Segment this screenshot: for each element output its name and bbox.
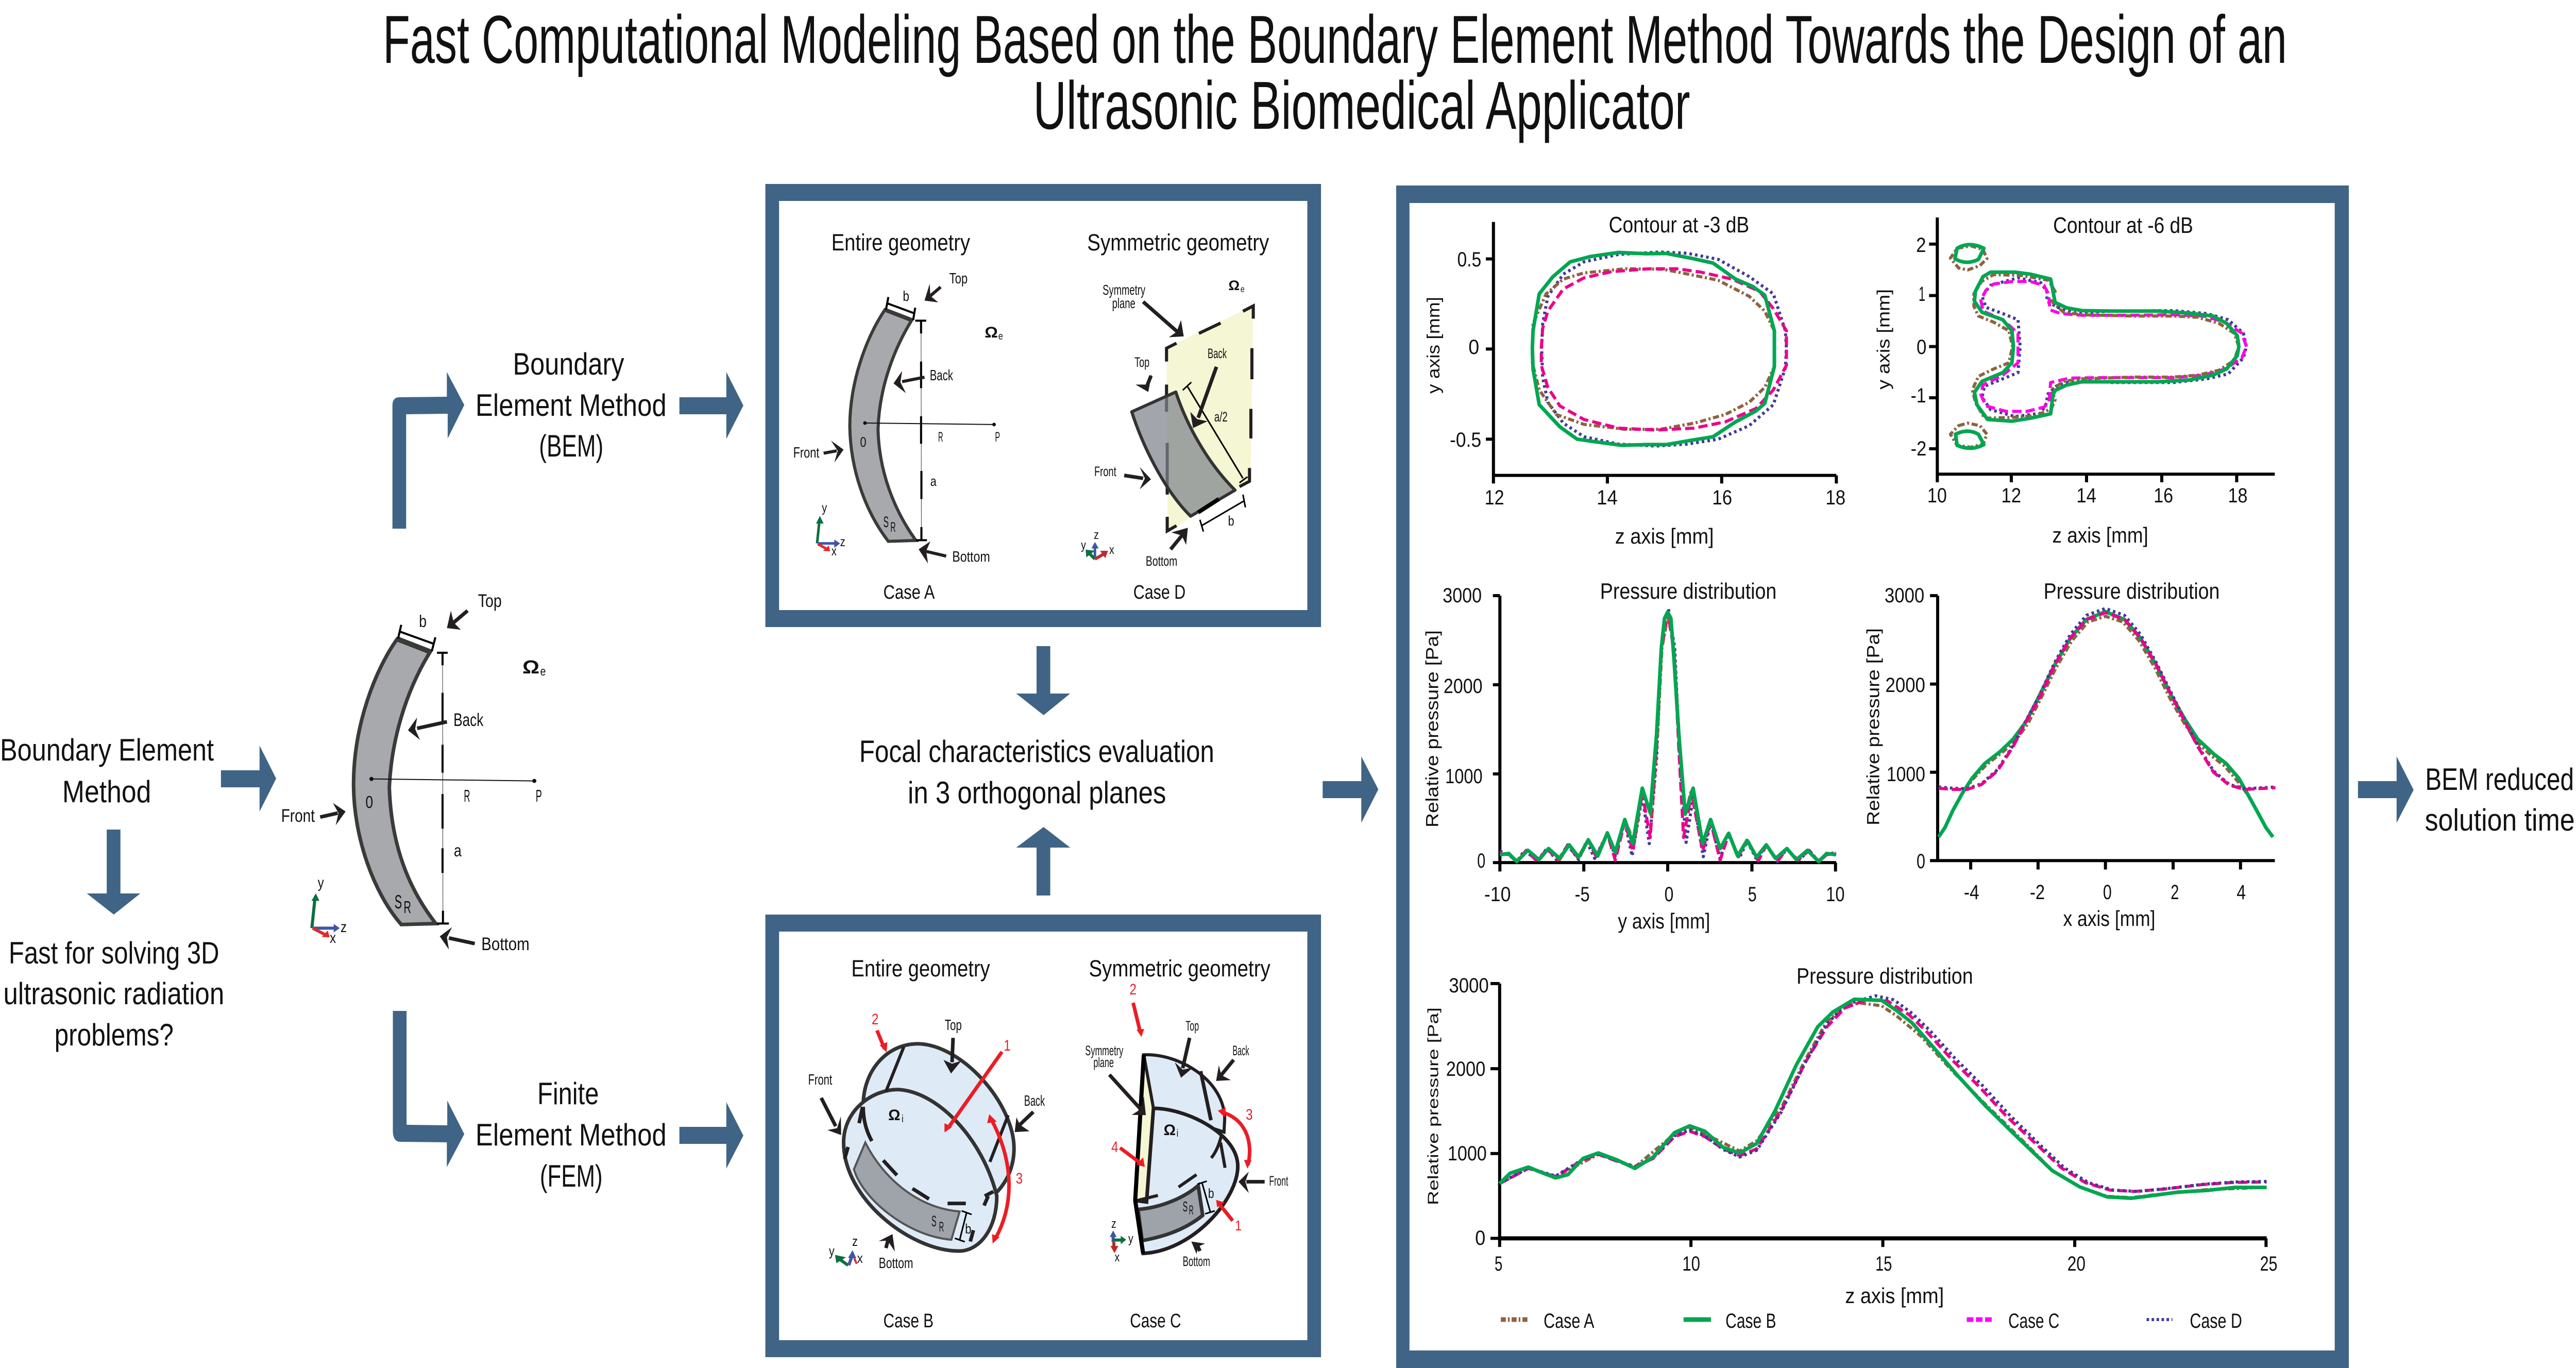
panel: case A geometry: R — [890, 520, 896, 535]
panel: case B geometry: Front — [808, 1071, 833, 1088]
chart: pressure along z axis — [1425, 964, 2277, 1308]
chart: pressure along x axis: Relative pressure [Pa] — [1863, 628, 1883, 825]
panel: case B geometry: R — [939, 1220, 944, 1235]
chart: pressure along y axis: Pressure distribution — [1600, 579, 1776, 604]
text: boundary element method — [0, 733, 214, 809]
chart: contour at -3 dB: -0.5 — [1450, 428, 1481, 451]
panel: case A geometry: z — [840, 534, 845, 549]
panel: case C geometry — [1085, 955, 1289, 1332]
chart: contour at -6 dB: 14 — [2076, 484, 2096, 507]
chart: pressure along y axis: 2000 — [1444, 674, 1483, 698]
panel: case C geometry: 4 — [1111, 1138, 1118, 1156]
panel: FEM cases frame — [766, 915, 1321, 1357]
panel: case A geometry: x — [832, 544, 837, 559]
chart: pressure along x axis: 1000 — [1887, 763, 1925, 786]
diagram: base geometry: Bottom — [481, 934, 530, 954]
chart: contour at -3 dB: z axis [mm] — [1615, 525, 1714, 549]
panel: case A geometry: P — [995, 430, 1000, 445]
arrow: FEM panel up to evaluation — [1016, 827, 1070, 896]
panel: case A geometry: Ω — [985, 323, 998, 341]
chart: pressure along x axis: 0 — [1917, 850, 1925, 873]
panel: case A geometry: Front — [793, 444, 820, 461]
diagram: base geometry: Ω — [522, 656, 539, 678]
chart: pressure along y axis: 3000 — [1443, 584, 1482, 607]
panel: case D geometry: Ω — [1228, 278, 1240, 294]
arrow: evaluation to charts — [1323, 756, 1378, 823]
panel: case A geometry: R — [938, 430, 943, 445]
panel: case C geometry: plane — [1093, 1055, 1114, 1071]
text: focal characteristics evaluation: Focal characteristics evaluation — [859, 734, 1214, 769]
arrow: up to BEM — [393, 372, 464, 529]
chart: contour at -6 dB: 0 — [1917, 335, 1926, 359]
chart: contour at -3 dB — [1424, 212, 1845, 549]
diagram: base geometry: P — [536, 787, 542, 806]
text: FEM: Finite — [537, 1076, 599, 1111]
panel: case D geometry: x — [1109, 543, 1114, 557]
chart: contour at -6 dB: 18 — [2228, 484, 2247, 507]
chart: pressure along x axis: 2000 — [1886, 673, 1925, 697]
arrow: FEM to panel — [680, 1102, 743, 1169]
title — [383, 2, 2287, 144]
chart: contour at -3 dB: 18 — [1825, 486, 1845, 509]
text: boundary element method: Method — [62, 774, 151, 809]
panel: case A geometry: 0 — [860, 435, 866, 450]
diagram: base geometry: R — [403, 898, 411, 917]
chart: pressure along z axis: z axis [mm] — [1845, 1284, 1944, 1308]
text: boundary element method: Boundary Element — [0, 733, 214, 767]
arrow: charts to conclusion — [2358, 756, 2414, 823]
chart: pressure along z axis: 20 — [2067, 1252, 2086, 1275]
chart: pressure along z axis: 1000 — [1448, 1142, 1487, 1165]
legend: Case C — [2008, 1309, 2059, 1332]
panel: case D geometry: Case D — [1133, 582, 1185, 603]
chart: pressure along z axis: Relative pressure [Pa] — [1425, 1007, 1442, 1205]
arrow: to geometry — [221, 746, 276, 812]
panel: case B geometry: S — [931, 1212, 937, 1230]
legend: Case D — [2190, 1309, 2242, 1332]
panel: case B geometry: Back — [1024, 1092, 1045, 1109]
chart: pressure along y axis: 5 — [1748, 883, 1757, 906]
panel: case B geometry: y — [829, 1244, 835, 1259]
chart: pressure along x axis: -2 — [2030, 881, 2045, 904]
text: BEM — [476, 347, 667, 463]
panel: case D geometry: z — [1094, 528, 1099, 542]
diagram: base geometry: b — [419, 612, 427, 631]
panel: case C geometry: Ω — [1164, 1121, 1176, 1139]
panel: case A geometry: a — [930, 474, 937, 489]
title: Fast Computational Modeling Based on the Boundary Element Method Towards the Design of an — [383, 2, 2287, 78]
text: BEM: Element Method — [476, 388, 667, 423]
panel: case B geometry: b — [965, 1222, 971, 1237]
panel: case A geometry: y — [822, 500, 827, 515]
text: conclusion: solution time — [2425, 803, 2575, 837]
panel: case D geometry: Symmetry — [1103, 282, 1145, 298]
panel: case C geometry: Symmetric geometry — [1089, 955, 1270, 982]
text: BEM: Boundary — [513, 347, 624, 381]
chart: contour at -3 dB: 14 — [1597, 486, 1618, 509]
panel: case A geometry: Case A — [883, 582, 935, 603]
panel: case C geometry: S — [1183, 1199, 1188, 1215]
panel: case D geometry: e — [1241, 284, 1245, 294]
panel: case A geometry: Entire geometry — [832, 229, 970, 256]
chart: pressure along y axis: -5 — [1575, 883, 1590, 906]
chart: contour at -6 dB — [1874, 213, 2275, 548]
chart: pressure along z axis: 15 — [1875, 1252, 1892, 1275]
text: conclusion: BEM reduced — [2425, 762, 2574, 797]
panel: results frame — [1396, 185, 2349, 1368]
chart: pressure along x axis: 3000 — [1885, 584, 1924, 607]
panel: case C geometry: 2 — [1129, 980, 1137, 998]
panel: case C geometry: z — [1111, 1217, 1116, 1231]
chart: contour at -3 dB: 16 — [1712, 486, 1732, 509]
diagram: base geometry: a — [454, 841, 462, 860]
panel: case B geometry: Ω — [888, 1106, 901, 1124]
panel: case B geometry: 2 — [872, 1010, 878, 1028]
chart: pressure along y axis: y axis [mm] — [1618, 909, 1710, 934]
text: FEM: Element Method — [476, 1118, 667, 1152]
chart: pressure along y axis: Relative pressure [Pa] — [1422, 630, 1442, 827]
chart: pressure along z axis: 3000 — [1449, 974, 1489, 997]
chart: contour at -6 dB: -2 — [1911, 437, 1926, 460]
chart: contour at -3 dB: Contour at -3 dB — [1609, 212, 1749, 238]
panel: case B geometry: 1 — [1004, 1036, 1011, 1054]
panel: case C geometry: b — [1208, 1187, 1214, 1202]
diagram: base geometry: x — [330, 928, 336, 947]
panel: case C geometry: 3 — [1246, 1105, 1253, 1123]
panel: case A geometry: S — [883, 513, 889, 531]
panel: case D geometry: Front — [1094, 464, 1116, 480]
panel: case A geometry — [793, 229, 1003, 603]
panel: case C geometry: 1 — [1235, 1218, 1242, 1234]
panel: case C geometry: x — [1114, 1250, 1120, 1264]
chart: contour at -6 dB: Contour at -6 dB — [2053, 213, 2193, 238]
chart: contour at -6 dB: 16 — [2154, 484, 2173, 507]
diagram: base geometry: e — [540, 664, 546, 679]
panel: case D geometry: b — [1228, 514, 1234, 529]
chart: contour at -6 dB: 1 — [1919, 282, 1925, 306]
chart: pressure along y axis: 0 — [1665, 883, 1673, 906]
panel: case A geometry: b — [903, 289, 909, 305]
arrow: to question — [87, 830, 140, 915]
panel: case D geometry: Top — [1134, 355, 1149, 370]
chart: pressure along x axis: Pressure distribution — [2044, 579, 2219, 604]
panel: case A geometry: Bottom — [952, 548, 990, 565]
legend: Case B — [1725, 1309, 1776, 1332]
panel: case B geometry: 3 — [1016, 1169, 1023, 1187]
panel: case C geometry: Top — [1185, 1019, 1199, 1034]
chart: pressure along y axis: -10 — [1484, 883, 1511, 906]
panel: case C geometry: Back — [1232, 1043, 1249, 1059]
panel: case C geometry: Symmetry — [1085, 1043, 1124, 1059]
chart: pressure along z axis: 25 — [2260, 1252, 2277, 1275]
chart: contour at -3 dB: 12 — [1485, 486, 1504, 509]
chart: pressure along z axis: Pressure distribution — [1797, 964, 1973, 989]
text: research question — [3, 936, 224, 1052]
chart: contour at -6 dB: y axis [mm] — [1874, 289, 1894, 390]
panel: case B geometry: z — [852, 1234, 858, 1249]
text: research question: problems? — [55, 1018, 174, 1052]
panel: case D geometry: Back — [1208, 346, 1227, 362]
text: focal characteristics evaluation — [859, 734, 1214, 810]
diagram: base geometry: Top — [478, 590, 502, 611]
panel: case D geometry: Bottom — [1146, 554, 1177, 569]
chart: contour at -6 dB: z axis [mm] — [2053, 523, 2148, 548]
text: focal characteristics evaluation: in 3 orthogonal planes — [908, 775, 1166, 810]
panel: case C geometry: y — [1128, 1231, 1133, 1246]
panel: case B geometry: Entire geometry — [851, 955, 990, 982]
arrow: BEM to panel — [680, 372, 743, 439]
chart: pressure along y axis: 1000 — [1445, 765, 1483, 788]
panel: case C geometry: R — [1189, 1203, 1194, 1218]
panel: case D geometry: a/2 — [1214, 410, 1228, 425]
panel: case A geometry: Back — [930, 367, 954, 384]
arrow: BEM panel down to evaluation — [1016, 646, 1070, 715]
text: FEM: (FEM) — [540, 1159, 603, 1193]
panel: case D geometry: y — [1081, 538, 1086, 552]
panel: case C geometry: Case C — [1130, 1310, 1181, 1332]
chart: pressure along x axis — [1863, 579, 2276, 931]
diagram: base geometry: 0 — [365, 793, 373, 812]
panel: case C geometry: Front — [1269, 1174, 1289, 1189]
chart: pressure along z axis: 2000 — [1446, 1057, 1485, 1080]
chart: contour at -6 dB: -1 — [1911, 384, 1926, 407]
text: BEM: (BEM) — [539, 429, 603, 463]
text: conclusion — [2425, 762, 2575, 837]
text: research question: ultrasonic radiation — [3, 976, 224, 1011]
chart: pressure along x axis: 2 — [2171, 881, 2179, 904]
chart: pressure along y axis: 10 — [1826, 883, 1845, 906]
legend: Case A — [1544, 1309, 1595, 1332]
panel: case C geometry: i — [1177, 1127, 1178, 1139]
chart: pressure along z axis: 0 — [1475, 1226, 1485, 1249]
panel: case C geometry: Bottom — [1183, 1254, 1210, 1270]
diagram: base geometry: R — [464, 787, 470, 806]
chart: pressure along y axis: 0 — [1477, 849, 1485, 872]
chart: contour at -6 dB: 2 — [1916, 233, 1926, 257]
text: FEM — [476, 1076, 667, 1193]
panel: case D geometry: plane — [1112, 296, 1136, 312]
text: research question: Fast for solving 3D — [9, 936, 219, 970]
panel: case A geometry: e — [998, 330, 1003, 342]
diagram: base geometry: Back — [453, 710, 483, 730]
title: Ultrasonic Biomedical Applicator — [1033, 67, 1690, 144]
chart: contour at -3 dB: 0 — [1468, 335, 1479, 359]
panel: case B geometry: i — [902, 1113, 904, 1124]
chart: pressure along y axis — [1422, 579, 1845, 934]
chart: contour at -3 dB: 0.5 — [1457, 248, 1481, 271]
diagram: base geometry: S — [395, 892, 402, 913]
panel: case B geometry: x — [857, 1251, 863, 1266]
diagram: base geometry: y — [318, 873, 324, 891]
panel: case D geometry: Symmetric geometry — [1087, 229, 1269, 256]
panel: case A geometry: Top — [950, 270, 968, 287]
diagram: base geometry: z — [341, 918, 347, 936]
chart: contour at -6 dB: 12 — [2001, 484, 2021, 507]
chart: pressure along z axis: 10 — [1682, 1252, 1700, 1275]
chart: pressure along x axis: x axis [mm] — [2063, 907, 2155, 931]
panel: case B geometry: Top — [945, 1017, 962, 1034]
panel: case B geometry: Bottom — [879, 1255, 913, 1272]
chart: contour at -3 dB: y axis [mm] — [1424, 297, 1444, 394]
legend — [1501, 1309, 2242, 1332]
arrow: down to FEM — [393, 1011, 464, 1167]
diagram: base geometry: Front — [281, 805, 315, 826]
chart: pressure along x axis: 0 — [2103, 881, 2112, 904]
chart: pressure along x axis: 4 — [2236, 881, 2246, 904]
panel: case D geometry — [1081, 229, 1269, 603]
panel: BEM cases frame — [766, 184, 1321, 627]
panel: case B geometry — [808, 955, 1045, 1332]
chart: pressure along z axis: 5 — [1495, 1252, 1502, 1275]
chart: pressure along x axis: -4 — [1964, 881, 1979, 904]
panel: case B geometry: Case B — [883, 1310, 934, 1332]
chart: contour at -6 dB: 10 — [1927, 484, 1947, 507]
diagram: base geometry — [281, 590, 546, 954]
